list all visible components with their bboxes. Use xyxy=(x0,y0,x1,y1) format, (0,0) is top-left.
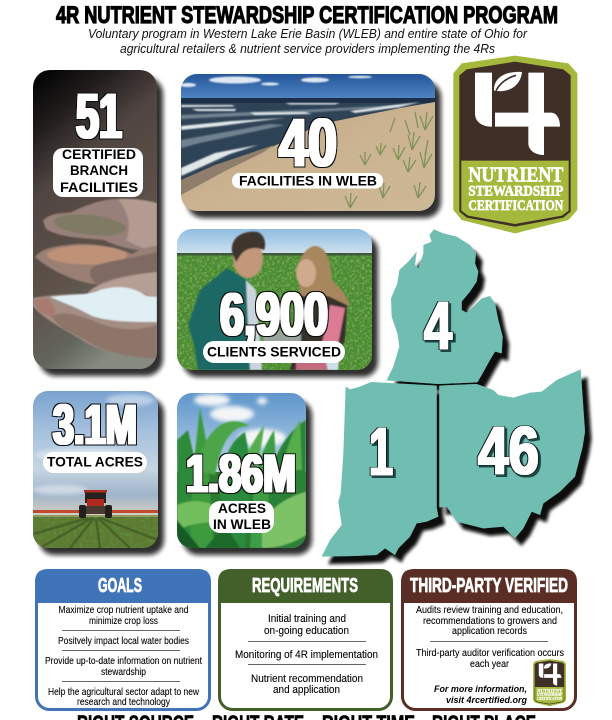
map: Michigan, Indiana and Ohio facility counts xyxy=(322,229,585,557)
panel: 4R certification badge xyxy=(453,56,577,233)
icon: small certification badge xyxy=(533,659,566,706)
icon: small certification badge: NUTRIENT xyxy=(537,689,563,695)
label: certified branch facilities: FACILITIES xyxy=(60,180,138,195)
label: certified branch facilities: BRANCH xyxy=(70,163,128,178)
stat number: 3.1M: 3.1M xyxy=(53,393,137,457)
stat number: 40: 40 xyxy=(279,105,337,181)
panel: requirements xyxy=(218,569,393,710)
panel: 1.86M acres in WLEB xyxy=(177,393,312,555)
subtitle: Voluntary program in Western Lake Erie Basin (WLEB) and entire state of Ohio for xyxy=(88,26,528,41)
verification text: each year xyxy=(470,659,510,670)
label: certified branch facilities xyxy=(53,147,143,197)
photo: hands holding fertilizer xyxy=(33,70,157,369)
verification text: recommendations to growers and xyxy=(423,616,557,627)
panel: goals xyxy=(35,569,211,710)
panel: 40 facilities in WLEB xyxy=(180,74,441,218)
state: Ohio xyxy=(439,369,585,538)
map count: Michigan 4: 4 xyxy=(424,288,452,364)
icon: 4R leaf logo xyxy=(475,72,560,155)
photo: lake beach xyxy=(180,74,435,211)
stat number: 1.86M: 1.86M xyxy=(186,444,296,504)
footer slogan xyxy=(77,711,536,720)
verification text: application records xyxy=(452,626,527,637)
more information note: visit 4rcertified.org xyxy=(446,695,527,706)
requirements list: Monitoring of 4R implementation xyxy=(235,649,378,661)
label: acres in WLEB xyxy=(209,501,274,533)
goals list: research and technology xyxy=(77,697,170,708)
panel: 51 certified branch facilities xyxy=(33,70,163,376)
goals list: Positvely impact local water bodies xyxy=(58,636,189,647)
goals list: minimize crop loss xyxy=(89,616,158,627)
requirements list: and application xyxy=(273,684,340,696)
stat number: 6,900: 6,900 xyxy=(220,281,328,348)
goals list: stewardship xyxy=(101,667,146,678)
label: total acres xyxy=(43,452,147,473)
label: clients serviced xyxy=(203,341,345,363)
verification text: Audits review training and education, xyxy=(416,605,563,616)
label: total acres: TOTAL ACRES xyxy=(47,454,143,470)
label: clients serviced: CLIENTS SERVICED xyxy=(207,344,341,360)
requirements list: Initial training and xyxy=(268,613,346,625)
more information note: For more information, xyxy=(434,684,527,695)
photo: sprayer tractor in field xyxy=(32,391,158,548)
icon: small certification badge: STEWARDSHIP xyxy=(537,693,563,697)
map count: Ohio 46: 46 xyxy=(478,413,539,489)
subtitle xyxy=(88,26,528,56)
heading: requirements: REQUIREMENTS xyxy=(252,575,358,597)
panel: third-party verified xyxy=(401,569,577,710)
state: Indiana xyxy=(322,382,438,557)
state: Michigan xyxy=(387,229,503,384)
requirements list xyxy=(235,613,378,696)
badge text: NUTRIENT xyxy=(468,165,564,187)
photo: two agronomists in a field xyxy=(177,229,372,370)
subtitle: agricultural retailers & nutrient service providers implementing the 4Rs xyxy=(120,41,495,56)
verification text xyxy=(416,605,564,670)
label: facilities in WLEB: FACILITIES IN WLEB xyxy=(239,174,377,188)
icon: tractor xyxy=(79,490,112,518)
panel: 3.1M total acres xyxy=(32,391,164,555)
badge text: CERTIFICATION xyxy=(468,198,563,214)
goals list: Maximize crop nutrient uptake and xyxy=(58,605,188,616)
label: acres in WLEB: ACRES xyxy=(218,501,266,516)
more information note xyxy=(434,684,527,706)
panel: 6,900 clients serviced xyxy=(177,229,378,377)
requirements list: on-going education xyxy=(264,625,349,637)
icon: small certification badge: CERTIFICATION xyxy=(537,696,562,701)
requirements list: Nutrient recommendation xyxy=(251,673,363,685)
badge text xyxy=(468,165,564,214)
heading: goals: GOALS xyxy=(98,575,142,597)
goals list: Provide up-to-date information on nutrient xyxy=(45,656,202,667)
stat number: 51: 51 xyxy=(76,80,122,152)
badge text: STEWARDSHIP xyxy=(468,184,563,200)
verification text: Third-party auditor verification occurs xyxy=(416,648,564,659)
goals list: Help the agricultural sector adapt to new xyxy=(48,687,200,698)
label: certified branch facilities: CERTIFIED xyxy=(62,147,136,162)
label: acres in WLEB: IN WLEB xyxy=(213,517,271,532)
photo: corn leaves and sky xyxy=(177,393,306,548)
goals list xyxy=(45,605,202,708)
map count: Indiana 1: 1 xyxy=(369,414,393,490)
